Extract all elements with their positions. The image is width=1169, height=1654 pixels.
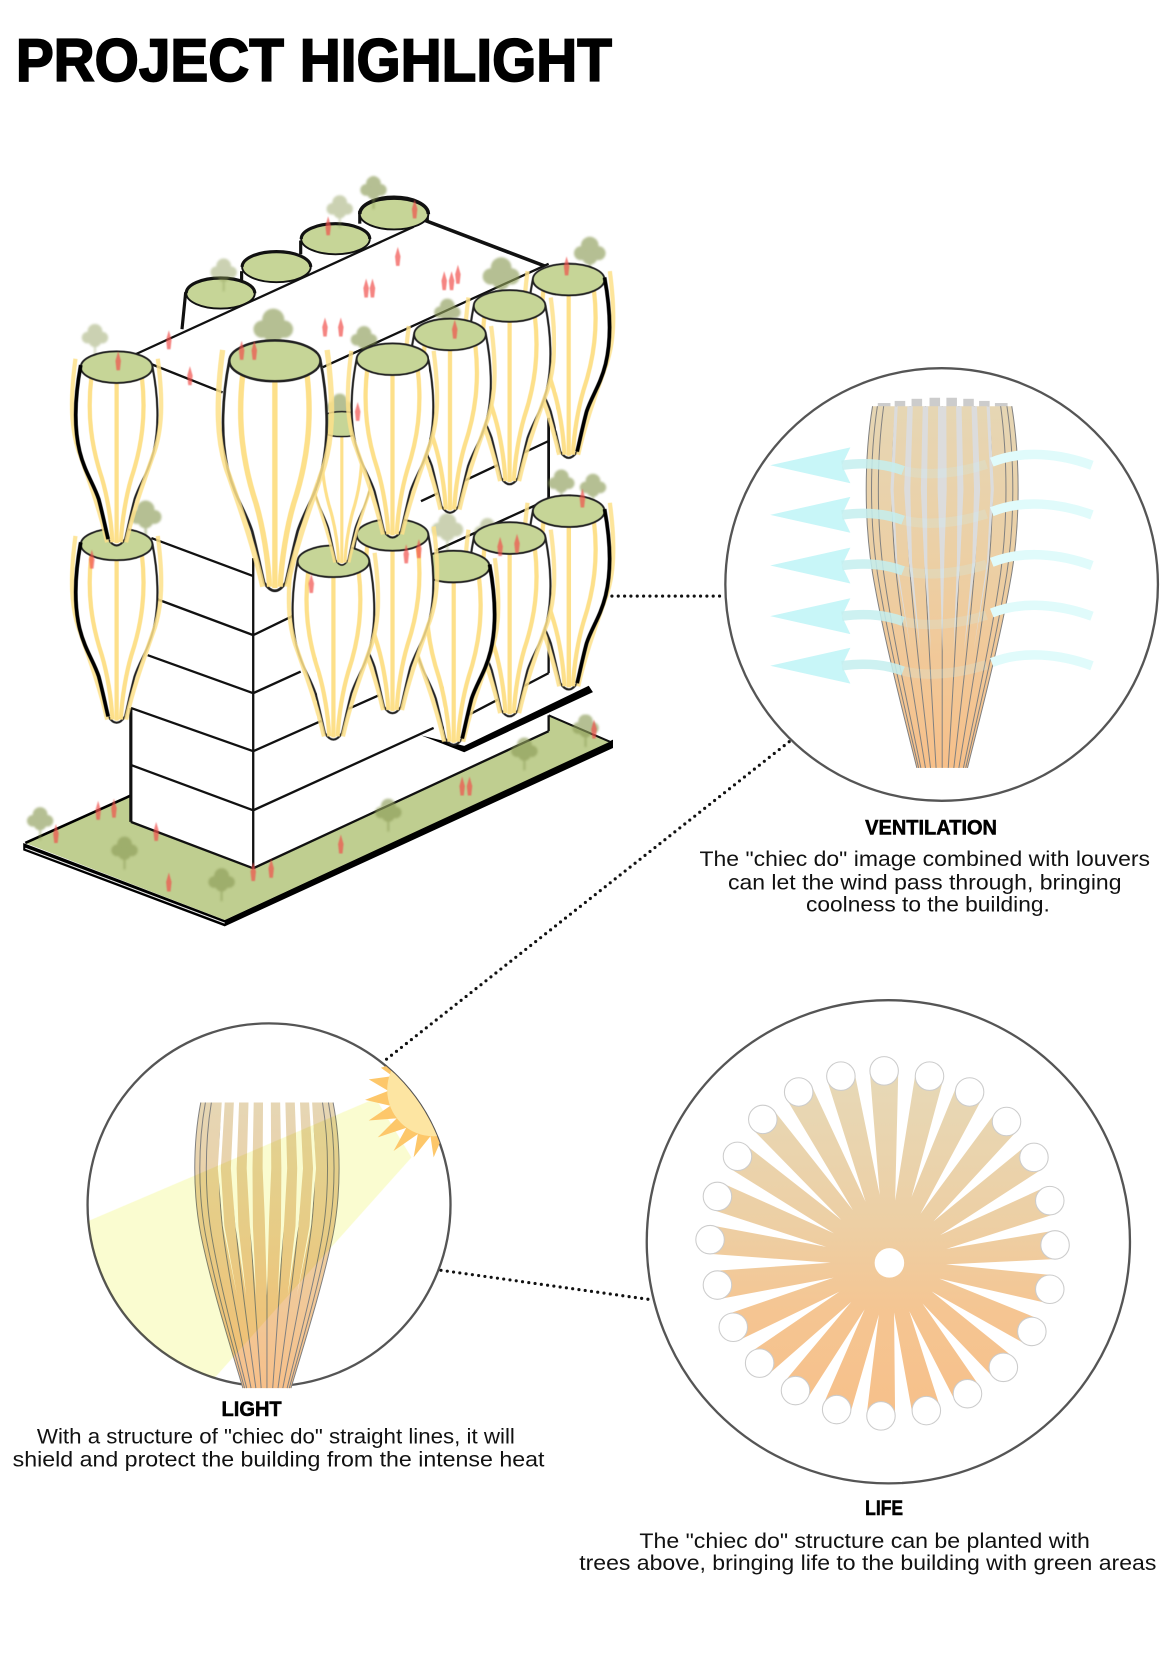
ventilation description: can let the wind pass through, bringing (728, 869, 1122, 894)
life heading: LIFE (865, 1497, 903, 1520)
ventilation description (700, 846, 1150, 917)
isometric building illustration (23, 176, 613, 926)
light circle (88, 1023, 451, 1386)
title: PROJECT HIGHLIGHT (16, 27, 612, 94)
louver pod (195, 1103, 339, 1388)
panel: life (579, 1000, 1157, 1575)
dotted connector: light to life (441, 1270, 652, 1300)
trees (27, 176, 606, 901)
icon: sun (365, 1066, 440, 1158)
slab (421, 686, 593, 752)
life description: The "chiec do" structure can be planted with (639, 1528, 1090, 1553)
lower row of planter pods (72, 495, 613, 745)
life circle (647, 1000, 1130, 1483)
ventilation circle (725, 368, 1158, 801)
dotted connector: building to ventilation (612, 595, 723, 598)
light description: shield and protect the building from the intense heat (13, 1447, 544, 1472)
radial louvers from above (712, 1075, 1052, 1412)
life description (579, 1528, 1157, 1575)
ventilation description: The "chiec do" image combined with louvers (700, 846, 1150, 871)
rooftop planters (182, 197, 428, 329)
back louvers (878, 398, 1008, 418)
ventilation description: coolness to the building. (806, 892, 1050, 917)
dotted connector: ventilation to light (385, 742, 789, 1060)
upper row of planter pods (72, 264, 613, 591)
ground plane (23, 715, 613, 926)
panel: light (13, 1023, 544, 1472)
louver pod (866, 406, 1018, 768)
sun beam (87, 1098, 411, 1384)
people (53, 199, 597, 892)
planter openings (696, 1057, 1069, 1430)
ventilation heading: VENTILATION (865, 817, 997, 840)
building lines (131, 221, 549, 868)
life description: trees above, bringing life to the building with green areas (579, 1550, 1157, 1575)
wind arrows (770, 447, 1092, 684)
light description: With a structure of "chiec do" straight lines, it will (37, 1423, 515, 1448)
light description (13, 1423, 544, 1472)
light heading: LIGHT (222, 1398, 282, 1421)
panel: ventilation (700, 368, 1158, 917)
